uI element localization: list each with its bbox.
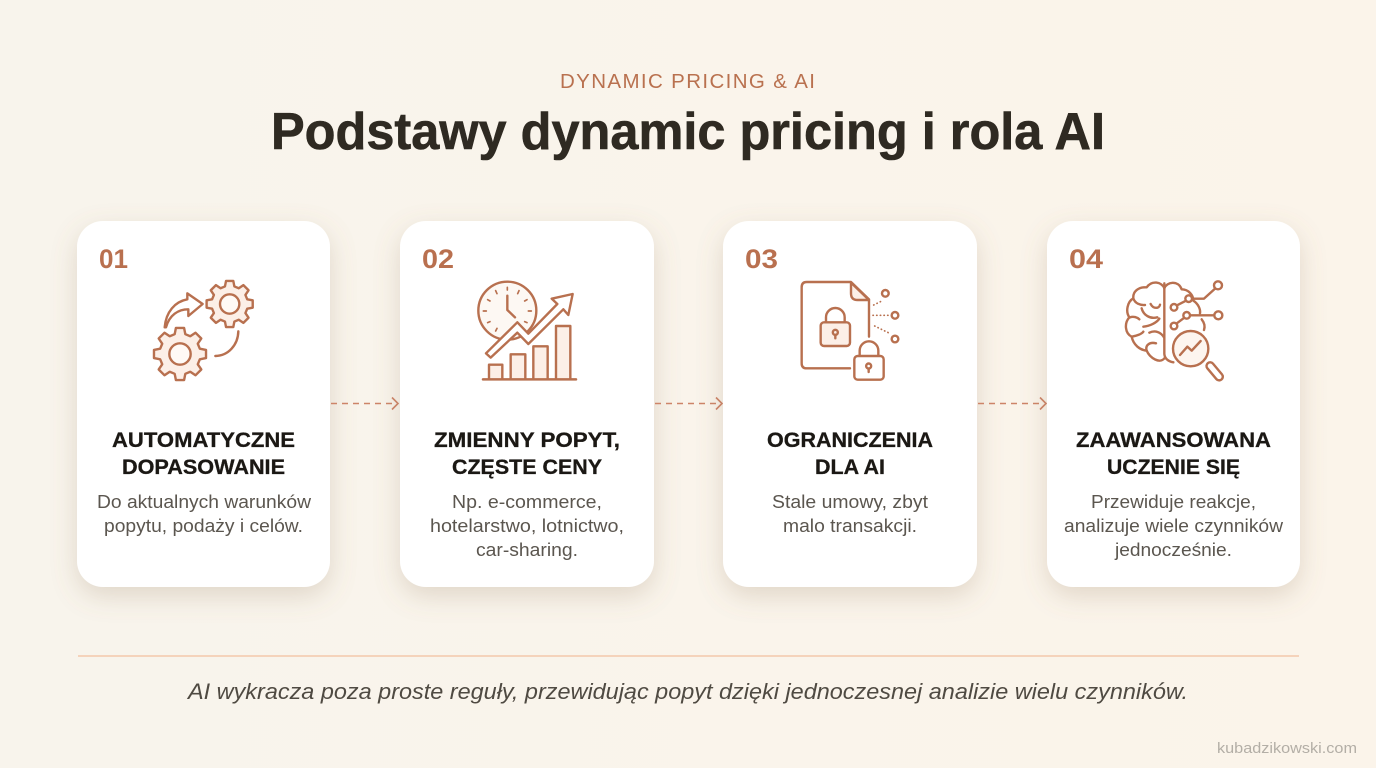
arrow 2 to 3 <box>655 398 722 410</box>
number 04: 04 <box>1069 244 1103 274</box>
heading: CZĘSTE CENY <box>452 456 602 479</box>
panel: card 02 <box>400 221 654 587</box>
heading: UCZENIE SIĘ <box>1107 456 1240 479</box>
panel: card 03 <box>723 221 977 587</box>
number 01: 01 <box>99 244 128 274</box>
description <box>430 492 624 560</box>
heading: ZMIENNY POPYT, <box>434 429 620 452</box>
description: Np. e-commerce, <box>452 492 602 512</box>
icon: gears with arrows <box>154 281 253 380</box>
description: Do aktualnych warunków <box>97 492 312 512</box>
description: malo transakcji. <box>783 516 917 536</box>
watermark: kubadzikowski.com <box>1217 741 1357 757</box>
panel: card 01 <box>77 221 330 587</box>
heading <box>1076 429 1271 479</box>
description <box>1064 492 1284 560</box>
description: Stale umowy, zbyt <box>772 492 928 512</box>
arrow 1 to 2 <box>331 398 398 410</box>
heading <box>434 429 620 479</box>
heading: AUTOMATYCZNE <box>112 429 295 452</box>
arrow 3 to 4 <box>978 398 1046 410</box>
description: hotelarstwo, lotnictwo, <box>430 516 624 536</box>
heading: OGRANICZENIA <box>767 429 933 452</box>
panel: card 04 <box>1047 221 1300 587</box>
heading: DLA AI <box>815 456 885 479</box>
description: Przewiduje reakcje, <box>1091 492 1256 512</box>
heading <box>112 429 295 479</box>
summary statement: AI wykracza poza proste reguły, przewidując popyt dzięki jednoczesnej analizie wielu czynników. <box>186 679 1188 704</box>
icon: brain with circuit and magnifier <box>1126 281 1224 382</box>
description: analizuje wiele czynników <box>1064 516 1284 536</box>
eyebrow: DYNAMIC PRICING & AI <box>560 70 815 93</box>
heading <box>767 429 933 479</box>
number 02: 02 <box>422 244 454 274</box>
title: Podstawy dynamic pricing i rola AI <box>271 103 1105 161</box>
heading: DOPASOWANIE <box>122 456 285 479</box>
icon: clock and rising chart <box>478 282 576 379</box>
icon: locked document with data points <box>802 282 898 380</box>
description <box>772 492 928 536</box>
description: jednocześnie. <box>1114 540 1232 560</box>
heading: ZAAWANSOWANA <box>1076 429 1271 452</box>
description: car-sharing. <box>476 540 578 560</box>
description: popytu, podaży i celów. <box>104 516 303 536</box>
description <box>97 492 312 536</box>
number 03: 03 <box>745 244 778 274</box>
